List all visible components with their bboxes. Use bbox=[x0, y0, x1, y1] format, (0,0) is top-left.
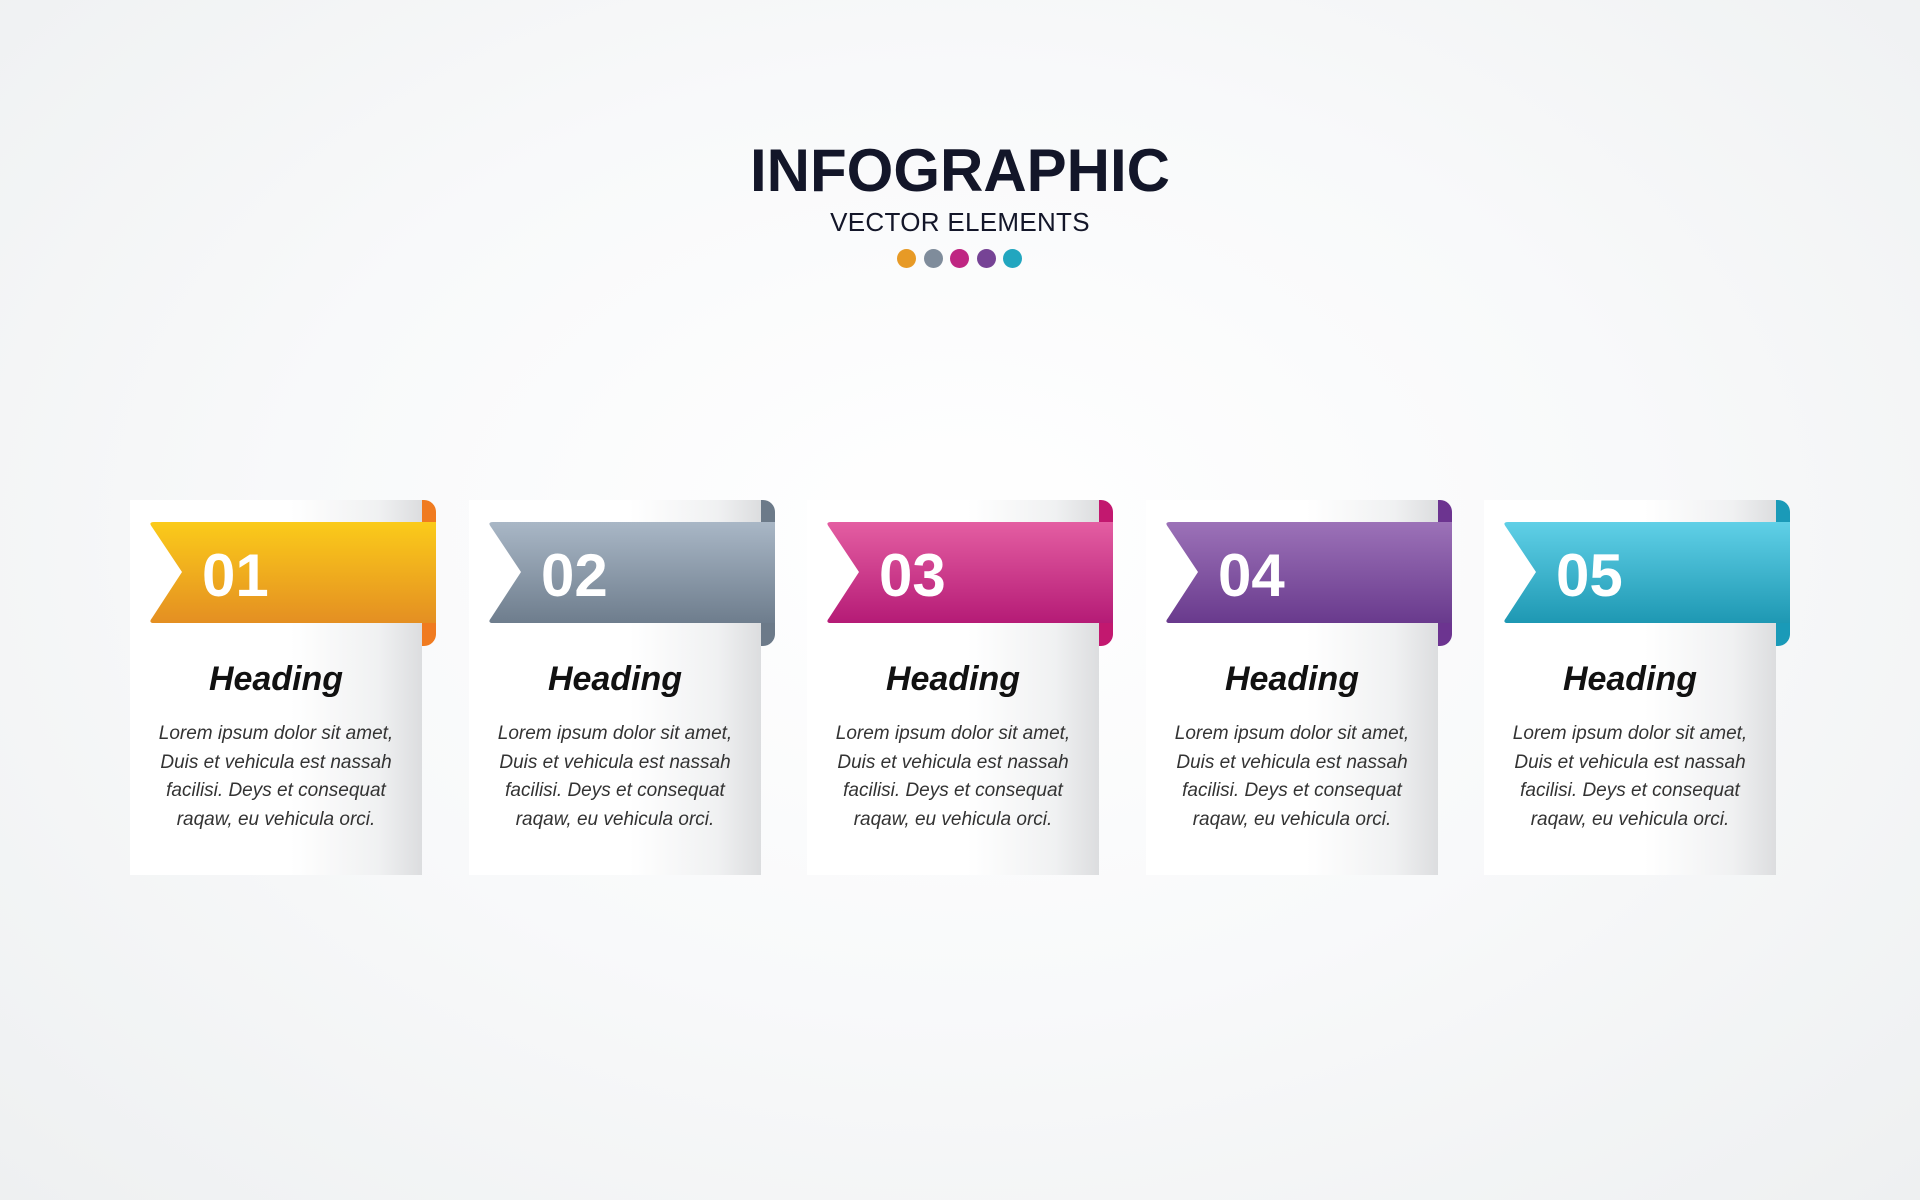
text 02: raqaw, eu vehicula orci. bbox=[516, 808, 714, 830]
text 04: Lorem ipsum dolor sit amet, bbox=[1175, 723, 1409, 744]
text 01: Duis et vehicula est nassah bbox=[160, 752, 392, 772]
card 02 bbox=[489, 500, 775, 875]
card 05: 05 bbox=[1556, 542, 1623, 609]
text 04: facilisi. Deys et consequat bbox=[1182, 780, 1402, 801]
heading 05: Heading bbox=[1563, 660, 1697, 698]
ribbon 05 bbox=[1504, 500, 1790, 646]
text 03: raqaw, eu vehicula orci. bbox=[854, 808, 1052, 830]
heading 02: Heading bbox=[548, 660, 682, 698]
card 05 bbox=[1504, 500, 1790, 875]
card 03: 03 bbox=[879, 542, 946, 609]
card 01: 01 bbox=[202, 542, 269, 609]
text 03: facilisi. Deys et consequat bbox=[843, 780, 1063, 801]
text 02: facilisi. Deys et consequat bbox=[505, 780, 725, 801]
text 01: facilisi. Deys et consequat bbox=[166, 780, 386, 801]
text 01: raqaw, eu vehicula orci. bbox=[177, 808, 375, 830]
ribbon 03 bbox=[827, 500, 1113, 646]
text 03: Lorem ipsum dolor sit amet, bbox=[836, 723, 1070, 744]
text 04: Duis et vehicula est nassah bbox=[1176, 752, 1408, 772]
card 04 bbox=[1166, 500, 1452, 875]
text 03 bbox=[836, 723, 1070, 830]
text 05 bbox=[1513, 723, 1747, 830]
text 02 bbox=[498, 723, 732, 830]
text 05: raqaw, eu vehicula orci. bbox=[1531, 808, 1729, 830]
card 03 bbox=[827, 500, 1113, 875]
text 05: facilisi. Deys et consequat bbox=[1520, 780, 1740, 801]
heading 04: Heading bbox=[1225, 660, 1359, 698]
card 02: 02 bbox=[541, 542, 608, 609]
ribbon 02 bbox=[489, 500, 775, 646]
ribbon 01 bbox=[150, 500, 436, 646]
title: INFOGRAPHIC bbox=[750, 137, 1170, 204]
text 01 bbox=[159, 723, 393, 830]
heading 03: Heading bbox=[886, 660, 1020, 698]
text 05: Duis et vehicula est nassah bbox=[1514, 752, 1746, 772]
card 01 bbox=[130, 500, 436, 875]
text 01: Lorem ipsum dolor sit amet, bbox=[159, 723, 393, 744]
text 02: Lorem ipsum dolor sit amet, bbox=[498, 723, 732, 744]
text 05: Lorem ipsum dolor sit amet, bbox=[1513, 723, 1747, 744]
text 04: raqaw, eu vehicula orci. bbox=[1193, 808, 1391, 830]
heading 01: Heading bbox=[209, 660, 343, 698]
text 03: Duis et vehicula est nassah bbox=[837, 752, 1069, 772]
subtitle: VECTOR ELEMENTS bbox=[830, 207, 1090, 237]
ribbon 04 bbox=[1166, 500, 1452, 646]
text 04 bbox=[1175, 723, 1409, 830]
text 02: Duis et vehicula est nassah bbox=[499, 752, 731, 772]
card 04: 04 bbox=[1218, 542, 1285, 609]
color dots bbox=[897, 249, 1022, 268]
